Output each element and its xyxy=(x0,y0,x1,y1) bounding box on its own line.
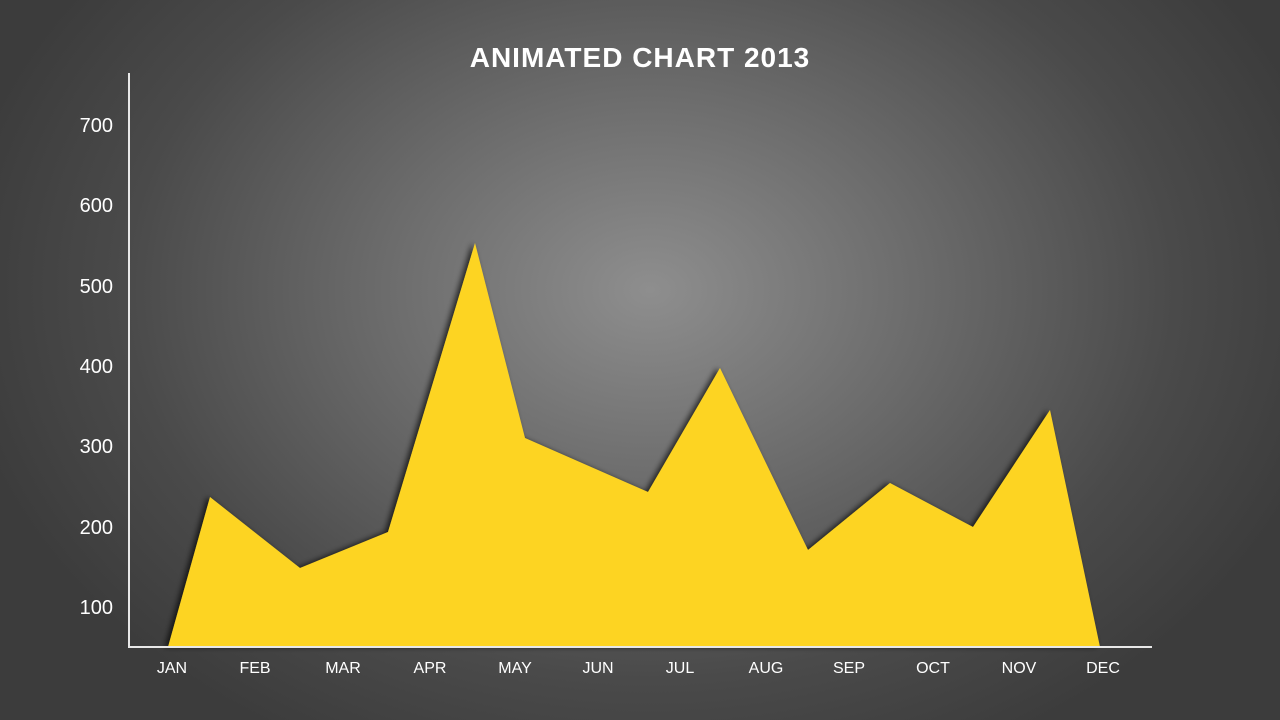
y axis labels: 600 xyxy=(80,195,113,217)
area series xyxy=(168,243,1100,647)
x axis labels: JUL xyxy=(666,660,694,677)
y axis labels: 300 xyxy=(80,436,113,458)
x axis labels: APR xyxy=(414,660,446,677)
x axis labels: SEP xyxy=(833,660,865,677)
title: ANIMATED CHART 2013 xyxy=(470,42,810,73)
x axis labels: MAY xyxy=(498,660,532,677)
x axis labels: OCT xyxy=(916,660,950,677)
x axis labels: JAN xyxy=(157,660,187,677)
x axis labels: NOV xyxy=(1002,660,1037,677)
x axis labels: FEB xyxy=(239,660,271,677)
x axis labels xyxy=(157,660,1120,677)
y axis labels: 100 xyxy=(80,597,113,619)
y axis labels: 400 xyxy=(80,356,113,378)
y axis labels: 500 xyxy=(80,276,113,298)
axes xyxy=(128,73,1152,648)
x axis labels: DEC xyxy=(1086,660,1120,677)
x axis labels: MAR xyxy=(325,660,361,677)
y axis labels: 200 xyxy=(80,517,113,539)
y axis labels: 700 xyxy=(80,115,113,137)
x axis labels: AUG xyxy=(749,660,783,677)
x axis labels: JUN xyxy=(582,660,614,677)
y axis labels xyxy=(80,115,113,619)
